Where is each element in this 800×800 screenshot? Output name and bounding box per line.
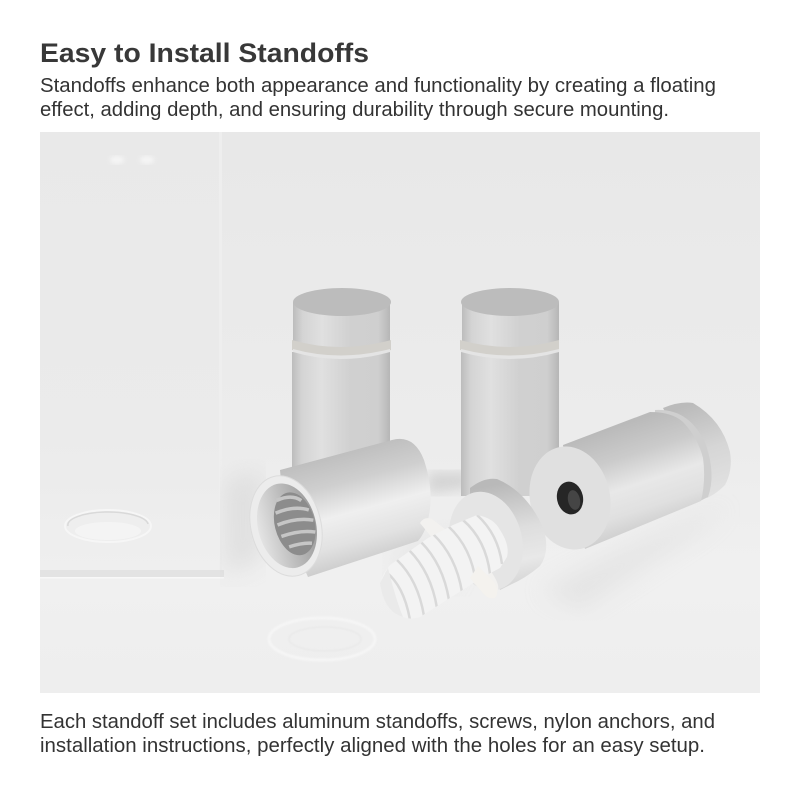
standoff: upright left	[292, 288, 391, 476]
caption text block	[40, 711, 715, 757]
nylon ring	[655, 410, 712, 502]
standoff: upright right	[460, 288, 559, 496]
title: Easy to Install Standoffs	[40, 38, 369, 68]
far cap	[663, 403, 731, 498]
floor ring	[269, 618, 375, 660]
hole	[556, 482, 584, 514]
intro text block	[40, 75, 716, 121]
product photo panel	[40, 132, 760, 693]
end face	[530, 446, 604, 550]
screw with anchor	[380, 479, 546, 620]
caption text block: Each standoff set includes aluminum standoffs, screws, nylon anchors, and	[40, 711, 715, 733]
intro text block: Standoffs enhance both appearance and functionality by creating a floating	[40, 75, 716, 97]
intro text block: effect, adding depth, and ensuring durability through secure mounting.	[40, 99, 669, 121]
acrylic plate	[40, 132, 224, 578]
shadows	[225, 470, 633, 597]
plate drill hole	[64, 509, 152, 536]
nylon washer front	[473, 571, 477, 582]
standoff: threaded, lying	[250, 438, 430, 577]
flange face	[450, 492, 518, 589]
caption text block: installation instructions, perfectly aligned with the holes for an easy setup.	[40, 735, 705, 757]
standoff: lying with hole	[520, 403, 731, 557]
head side	[470, 479, 546, 590]
body	[563, 412, 704, 549]
thread body	[380, 515, 508, 620]
nylon washer back	[420, 518, 498, 597]
